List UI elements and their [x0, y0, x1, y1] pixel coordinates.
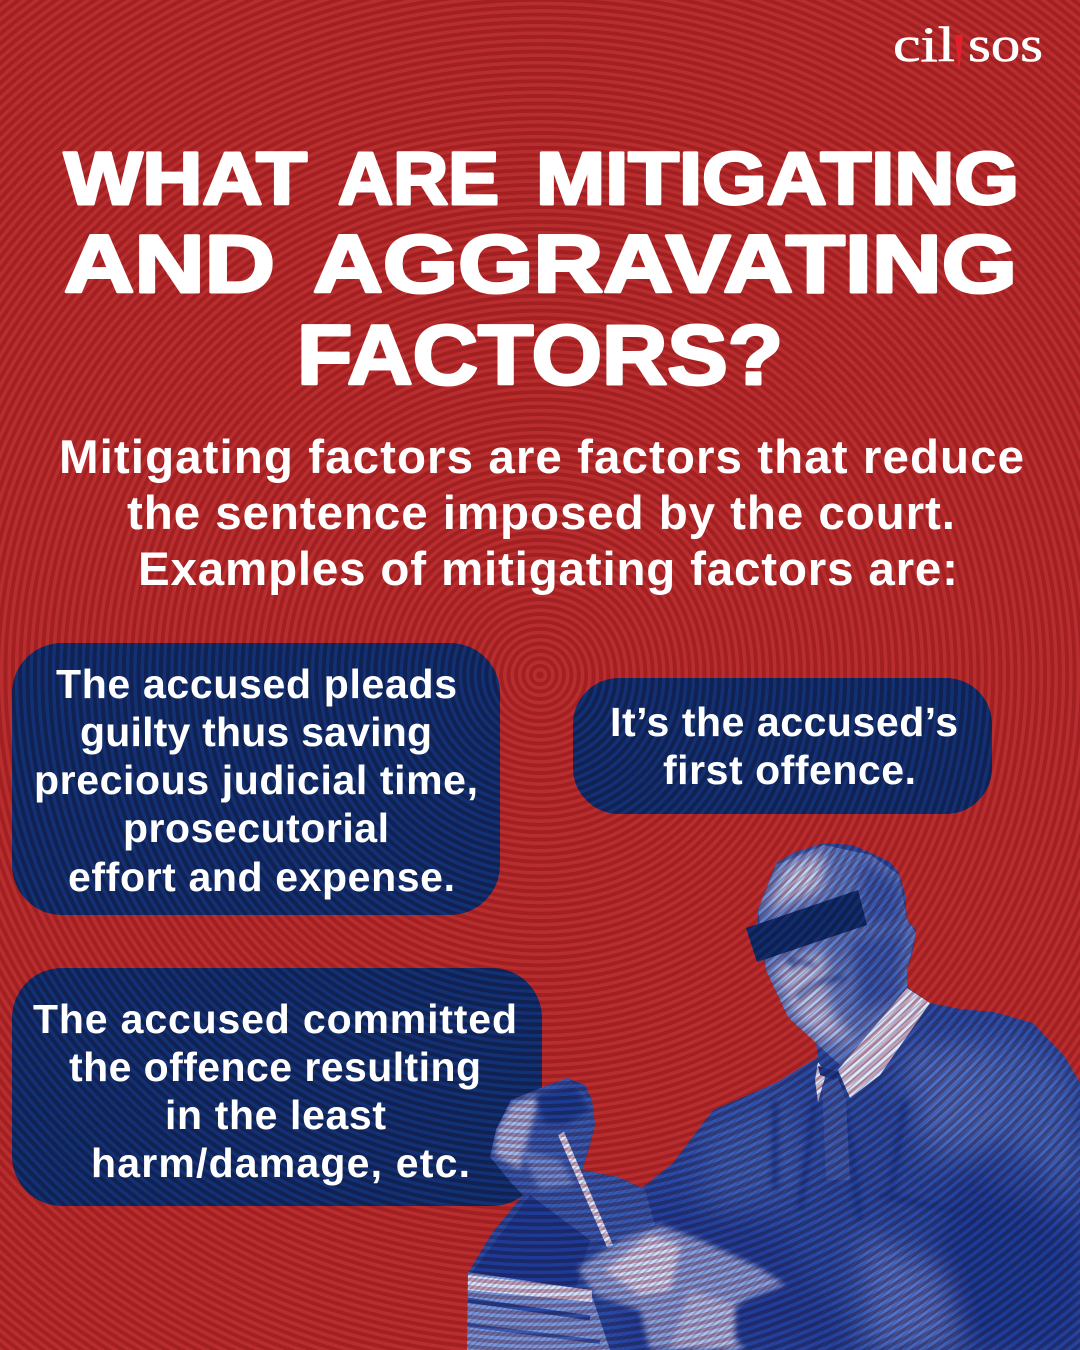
- logo: cilisos: sos: [968, 16, 1043, 72]
- title: [64, 137, 1019, 402]
- intro text: the sentence imposed by the court.: [127, 487, 955, 540]
- bubble text: pleads guilty: effort and expense.: [68, 854, 455, 900]
- censor bar over eyes: [746, 890, 867, 962]
- gavel handle: [558, 1132, 613, 1247]
- bubble text: first offence: [610, 699, 958, 793]
- intro text: [59, 431, 1024, 596]
- bubble text: first offence: It’s the accused’s: [610, 699, 958, 745]
- robe folds: [769, 1098, 942, 1220]
- bubble: least harm: [12, 968, 542, 1206]
- bubble text: least harm: the offence resulting: [69, 1044, 481, 1090]
- title: FACTORS?: [297, 308, 783, 402]
- bubble text: least harm: harm/damage, etc.: [91, 1140, 470, 1186]
- bubble text: pleads guilty: [34, 661, 478, 900]
- bubble text: pleads guilty: guilty thus saving: [80, 709, 432, 755]
- bubble text: least harm: in the least: [165, 1092, 386, 1138]
- bubble text: least harm: The accused committed: [33, 996, 517, 1042]
- lower-left shadow behind gavel: [470, 1195, 590, 1290]
- intro text: Examples of mitigating factors are:: [138, 543, 958, 596]
- bubble text: pleads guilty: prosecutorial: [123, 805, 389, 851]
- bubble text: least harm: [33, 996, 517, 1186]
- halftone line texture: [460, 840, 1080, 1350]
- judge collar and tie: [815, 988, 930, 1180]
- illustration: judge holding a gavel: [460, 840, 1080, 1350]
- judge mouth and nose: [790, 960, 845, 998]
- logo: cilisos: [893, 16, 1043, 72]
- logo: cilisos: cil: [893, 16, 955, 72]
- desk: [467, 1272, 610, 1350]
- bubble text: pleads guilty: precious judicial time,: [34, 757, 478, 803]
- intro text: Mitigating factors are factors that reduce: [59, 431, 1024, 484]
- title: AND: [64, 219, 275, 310]
- judge hand gripping gavel: [490, 1078, 655, 1240]
- title: MITIGATING: [536, 137, 1019, 220]
- judge robe: [460, 840, 1080, 1350]
- bubble: first offence: [573, 678, 992, 814]
- bubble text: pleads guilty: The accused pleads: [56, 661, 457, 707]
- title: AGGRAVATING: [313, 219, 1017, 310]
- bubble text: first offence: first offence.: [663, 747, 916, 793]
- judge head: [758, 845, 916, 1065]
- title: WHAT: [64, 137, 307, 220]
- judge lower hand: [578, 1225, 785, 1350]
- bubble: pleads guilty: [12, 643, 500, 915]
- title: ARE: [338, 137, 499, 220]
